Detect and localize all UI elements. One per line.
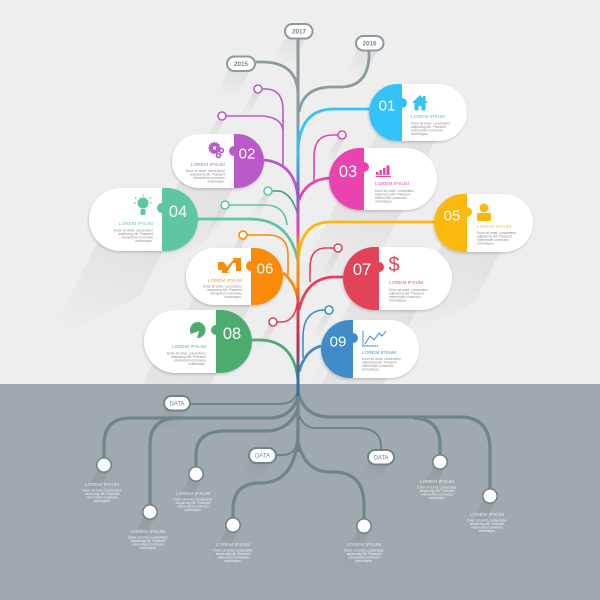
card 06: Dolor sit amet, consectetur xyxy=(203,284,243,288)
root label F: adipiscing elit. Praesent xyxy=(420,489,454,493)
card 08: LOREM IPSUM xyxy=(172,344,206,350)
card 03: elementum commodo xyxy=(375,196,407,200)
root label A: Dolor sit amet, consectetur xyxy=(82,488,123,492)
branch: 06 xyxy=(283,273,298,300)
card 08: elementum commodo xyxy=(174,358,206,362)
root label G: adipiscing elit. Praesent xyxy=(347,552,381,556)
card 02: scelerisque. xyxy=(207,180,225,184)
card 03: 03 xyxy=(339,163,357,181)
icon: dollar: $ xyxy=(388,254,400,276)
icon: arrows xyxy=(218,258,241,273)
card 02 xyxy=(172,134,264,188)
root label C: LOREM IPSUM xyxy=(176,491,210,497)
root label D: scelerisque. xyxy=(224,559,242,563)
card 09: adipiscing elit. Praesent xyxy=(362,360,397,364)
root label G: elementum commodo xyxy=(348,556,380,560)
root label B: Dolor sit amet, consectetur xyxy=(128,536,169,540)
data label: center xyxy=(249,448,276,463)
card 01: scelerisque. xyxy=(411,132,429,136)
card 09: 09 xyxy=(330,334,346,350)
root label C xyxy=(173,491,214,512)
card 07: scelerisque. xyxy=(389,298,407,302)
branch nodes xyxy=(218,85,346,326)
root label F xyxy=(417,479,458,500)
root label F: LOREM IPSUM xyxy=(420,479,454,485)
root system xyxy=(104,384,490,520)
branch: 09 xyxy=(299,346,321,372)
card 02: adipiscing elit. Praesent xyxy=(190,172,225,176)
data label: left xyxy=(164,396,190,410)
card 04: adipiscing elit. Praesent xyxy=(118,232,153,236)
root label A: elementum commodo xyxy=(86,496,118,500)
icon: gears xyxy=(209,142,224,158)
root label D: LOREM IPSUM xyxy=(216,542,250,548)
card 04: LOREM IPSUM xyxy=(119,221,153,227)
card 06: scelerisque. xyxy=(224,295,242,299)
branch: 03 xyxy=(299,178,329,200)
card 01: 01 xyxy=(379,98,395,114)
card 04: 04 xyxy=(169,203,187,221)
branch: red node xyxy=(273,296,298,322)
root label E xyxy=(467,512,508,533)
root label B: scelerisque. xyxy=(139,546,157,550)
card 03 xyxy=(329,148,437,210)
root label B xyxy=(128,529,169,550)
branch: 04 xyxy=(198,219,298,262)
ground shadows xyxy=(76,400,496,571)
data label: left: DATA xyxy=(169,402,185,408)
card 07: elementum commodo xyxy=(389,295,421,299)
icon: line chart xyxy=(363,331,386,346)
card 05: scelerisque. xyxy=(477,242,495,246)
branch: 05 xyxy=(298,222,434,262)
icon: bar chart xyxy=(376,166,391,177)
card 04: elementum commodo xyxy=(121,236,153,240)
root label G: LOREM IPSUM xyxy=(347,542,381,548)
card 04 xyxy=(89,188,198,251)
root label E: elementum commodo xyxy=(471,526,503,530)
card 05 xyxy=(434,194,533,252)
root label C: Dolor sit amet, consectetur xyxy=(173,498,214,502)
card 07: Dolor sit amet, consectetur xyxy=(389,288,429,292)
branch: 2016 xyxy=(299,51,369,112)
icon: house xyxy=(412,95,428,110)
root label D: adipiscing elit. Praesent xyxy=(216,552,250,556)
card 07: adipiscing elit. Praesent xyxy=(389,292,424,296)
branches xyxy=(198,38,434,396)
card 02: LOREM IPSUM xyxy=(191,162,225,168)
root label A: LOREM IPSUM xyxy=(85,482,119,488)
card 07 xyxy=(343,247,452,310)
card 06: 06 xyxy=(257,260,273,278)
root label A: adipiscing elit. Praesent xyxy=(85,492,119,496)
card 08 xyxy=(144,310,252,373)
card 03: adipiscing elit. Praesent xyxy=(375,192,410,196)
card 08: adipiscing elit. Praesent xyxy=(171,355,206,359)
card 07: 07 xyxy=(353,261,371,279)
branch: 02 sub-branches xyxy=(258,89,283,165)
branch: 04 sub-branches xyxy=(268,191,298,216)
branch: 01 xyxy=(298,109,370,150)
card 06: LOREM IPSUM xyxy=(208,278,242,284)
card 08: scelerisque. xyxy=(188,362,206,366)
root label D: elementum commodo xyxy=(217,556,249,560)
branch: 02 xyxy=(264,160,298,198)
card 06 xyxy=(186,248,283,305)
card 01: LOREM IPSUM xyxy=(411,114,445,120)
root label B: adipiscing elit. Praesent xyxy=(131,539,165,543)
root label C: elementum commodo xyxy=(177,504,209,508)
card 09: elementum commodo xyxy=(362,364,394,368)
card 01: Dolor sit amet, consectetur xyxy=(411,122,451,126)
year label: 2016 xyxy=(356,36,384,50)
branch: 06 sub-branch xyxy=(243,235,288,275)
card 08: 08 xyxy=(223,325,241,343)
root label A: scelerisque. xyxy=(93,499,111,503)
icon: lightbulb xyxy=(134,194,152,215)
year label: 2017: 2017 xyxy=(292,28,306,36)
data label: right xyxy=(368,450,394,464)
root label F: elementum commodo xyxy=(421,492,453,496)
branch: 03 sub-branch xyxy=(314,135,342,182)
card 05: elementum commodo xyxy=(477,238,509,242)
card 08: Dolor sit amet, consectetur xyxy=(167,352,207,356)
icon: pie chart xyxy=(190,322,206,338)
branch: 2015 xyxy=(256,62,298,92)
root label C: scelerisque. xyxy=(184,508,202,512)
icon: person xyxy=(477,204,491,221)
year label: 2016: 2016 xyxy=(362,41,377,48)
root label A xyxy=(82,482,123,503)
branch: 08 xyxy=(252,340,298,380)
root label E: LOREM IPSUM xyxy=(470,512,504,518)
root label E: scelerisque. xyxy=(478,529,496,533)
card 09 xyxy=(321,320,419,378)
root label G: scelerisque. xyxy=(355,559,373,563)
ground panel xyxy=(0,384,600,600)
root label G: Dolor sit amet, consectetur xyxy=(344,548,385,552)
card 01 xyxy=(369,84,467,141)
year label: 2017 xyxy=(285,24,312,38)
branch: 07 sub-branch xyxy=(310,248,338,282)
root nodes xyxy=(97,455,497,533)
root label F: scelerisque. xyxy=(428,496,446,500)
trunk xyxy=(296,38,300,396)
card 06: elementum commodo xyxy=(210,292,242,296)
card 09: scelerisque. xyxy=(362,368,380,372)
card 03: scelerisque. xyxy=(375,200,393,204)
root label B: LOREM IPSUM xyxy=(131,529,165,535)
branch: 07 xyxy=(299,277,343,310)
root label D: Dolor sit amet, consectetur xyxy=(213,548,254,552)
card 06: adipiscing elit. Praesent xyxy=(207,288,242,292)
card 05: 05 xyxy=(444,208,460,224)
long shadows xyxy=(88,38,500,384)
root label B: elementum commodo xyxy=(132,542,164,546)
data label: center: DATA xyxy=(255,454,270,460)
root label G xyxy=(344,542,385,563)
card 02: 02 xyxy=(239,146,255,162)
card 01: adipiscing elit. Praesent xyxy=(411,125,446,129)
root label E: adipiscing elit. Praesent xyxy=(470,522,504,526)
card 04: Dolor sit amet, consectetur xyxy=(114,228,154,232)
root label D xyxy=(213,542,254,563)
card 02: elementum commodo xyxy=(193,176,225,180)
year label: 2015: 2015 xyxy=(234,61,248,68)
card 09: LOREM IPSUM xyxy=(362,350,396,356)
card 01: elementum commodo xyxy=(411,128,443,132)
card 05: LOREM IPSUM xyxy=(477,224,511,230)
card 09: Dolor sit amet, consectetur xyxy=(362,357,402,361)
card 04: scelerisque. xyxy=(135,239,153,243)
card 05: adipiscing elit. Praesent xyxy=(477,234,512,238)
year label: 2015 xyxy=(227,56,255,71)
card 03: LOREM IPSUM xyxy=(375,181,409,187)
root label F: Dolor sit amet, consectetur xyxy=(417,486,458,490)
card 02: Dolor sit amet, consectetur xyxy=(186,169,226,173)
root label C: adipiscing elit. Praesent xyxy=(176,501,210,505)
root label E: Dolor sit amet, consectetur xyxy=(467,518,508,522)
card 03: Dolor sit amet, consectetur xyxy=(375,189,415,193)
data label: right: DATA xyxy=(373,456,389,462)
card 05: Dolor sit amet, consectetur xyxy=(477,231,517,235)
card 07: LOREM IPSUM xyxy=(389,280,423,286)
branch: 09 sub-branch xyxy=(303,310,329,358)
